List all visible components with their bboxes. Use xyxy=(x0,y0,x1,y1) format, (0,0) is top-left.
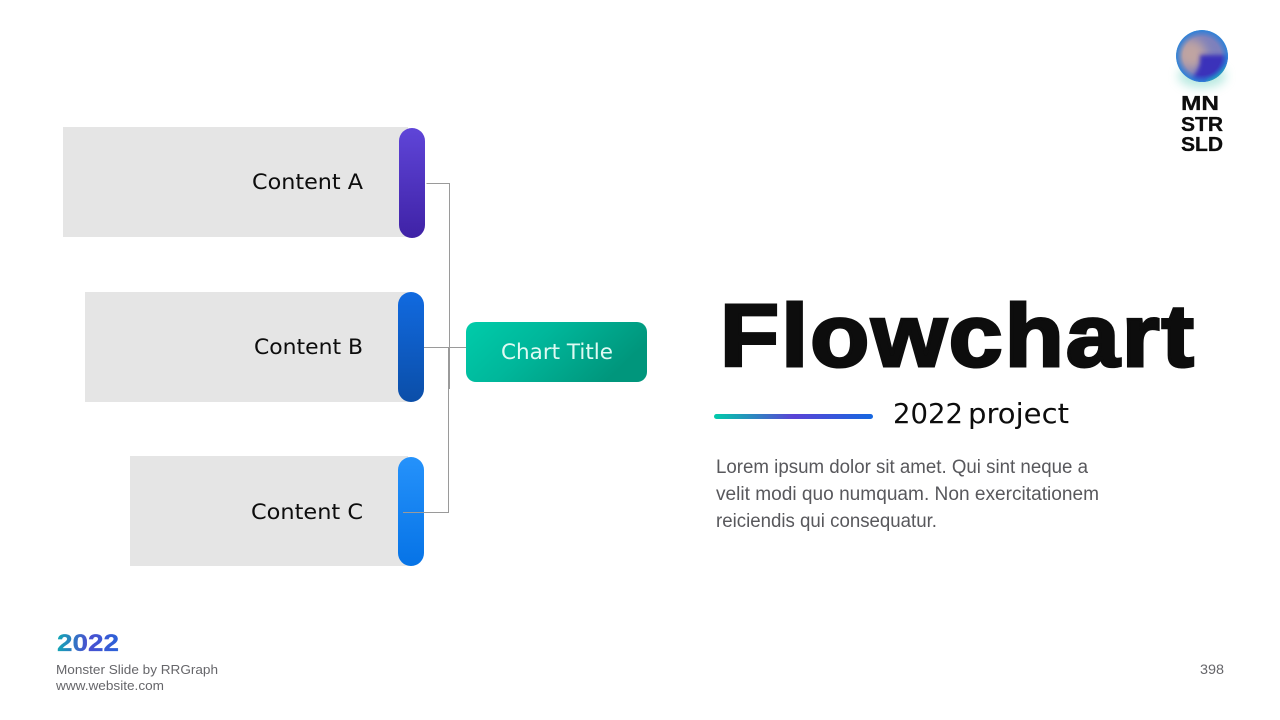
body text: velit modi quo numquam. Non exercitationem xyxy=(716,484,1099,505)
panel: content A xyxy=(63,127,425,238)
body text: reiciendis qui consequatur. xyxy=(716,511,937,532)
panel: content B xyxy=(85,292,424,402)
logo wordmark: STR xyxy=(1181,114,1224,136)
subtitle xyxy=(893,397,1069,430)
label: content C: Content C xyxy=(251,500,363,524)
body text: Lorem ipsum dolor sit amet. Qui sint neque a xyxy=(716,457,1088,478)
node label: Chart Title xyxy=(501,340,613,364)
label: content A: Content A xyxy=(252,170,364,194)
logo wordmark: MN xyxy=(1181,93,1219,115)
logo glow xyxy=(1178,64,1226,88)
logo xyxy=(1176,30,1232,156)
body text xyxy=(716,457,1099,532)
page number: 398 xyxy=(1200,661,1224,677)
footer credits: Monster Slide by RRGraph xyxy=(56,662,218,677)
logo wordmark: SLD xyxy=(1181,134,1223,156)
footer year: 2022 xyxy=(57,630,119,657)
title: Flowchart xyxy=(720,286,1196,385)
logo wordmark xyxy=(1181,93,1224,156)
node: chart title xyxy=(466,322,647,382)
accent pill C xyxy=(398,457,424,566)
subtitle: project xyxy=(968,397,1069,430)
footer credits xyxy=(55,662,218,693)
accent pill A xyxy=(399,128,425,238)
label: content B: Content B xyxy=(254,335,363,359)
accent pill B xyxy=(398,292,424,402)
subtitle: 2022 xyxy=(893,397,963,430)
footer credits: www.website.com xyxy=(55,678,164,693)
connector lines xyxy=(403,184,466,512)
panel: content C xyxy=(130,456,424,566)
logo sphere xyxy=(1176,30,1228,82)
gradient rule xyxy=(714,414,873,419)
